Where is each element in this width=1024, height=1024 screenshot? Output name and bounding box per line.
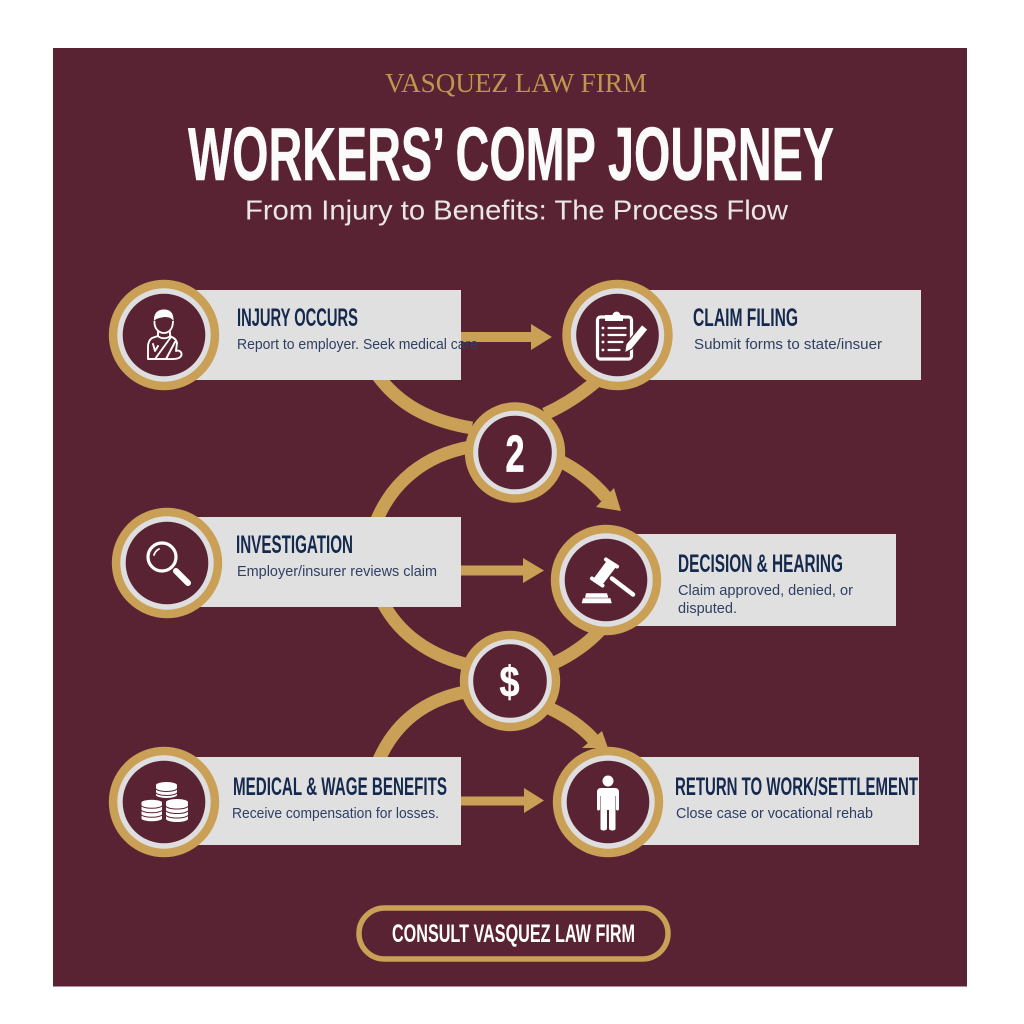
step badge: 2: 2 bbox=[506, 426, 524, 484]
card: return to work bbox=[630, 757, 919, 845]
card: decision and hearing bbox=[630, 534, 896, 626]
text: injury occurs: Report to employer. Seek medical care bbox=[237, 337, 478, 353]
heading: injury occurs: INJURY OCCURS bbox=[237, 304, 358, 332]
step badge: dollar: $ bbox=[500, 658, 520, 707]
subtitle: From Injury to Benefits: The Process Flow bbox=[245, 194, 789, 226]
heading: decision and hearing: DECISION & HEARING bbox=[678, 550, 843, 578]
icon: coin stacks bbox=[113, 751, 215, 853]
step badge: dollar bbox=[464, 635, 556, 727]
arrow: circle 2 to decision bbox=[560, 461, 621, 511]
arrow: dollar circle to return to work bbox=[549, 708, 608, 748]
card: injury occurs bbox=[190, 290, 478, 380]
call to action button bbox=[359, 908, 668, 959]
arrow: benefits to return to work bbox=[455, 788, 544, 813]
arrow: investigation to decision bbox=[455, 558, 544, 583]
arrow: injury to claim filing bbox=[455, 324, 552, 350]
step badge: 2 bbox=[469, 407, 561, 498]
text: claim filing: Submit forms to state/insuer bbox=[694, 337, 882, 353]
heading: medical and wage benefits: MEDICAL & WAGE BENEFITS bbox=[233, 773, 447, 801]
text: investigation: Employer/insurer reviews claim bbox=[237, 564, 437, 580]
card: investigation bbox=[195, 517, 461, 607]
icon: standing person bbox=[557, 751, 659, 853]
icon: magnifying glass bbox=[116, 512, 218, 614]
card: claim filing bbox=[640, 290, 921, 380]
text: decision and hearing: disputed. bbox=[678, 601, 737, 617]
icon: gavel bbox=[555, 529, 657, 631]
firm name: VASQUEZ LAW FIRM bbox=[385, 68, 647, 98]
text: return to work: Close case or vocational rehab bbox=[676, 806, 873, 822]
card: medical and wage benefits bbox=[190, 757, 461, 845]
text: decision and hearing: Claim approved, denied, or bbox=[678, 583, 853, 599]
icon: injured person bbox=[113, 284, 215, 386]
text: medical and wage benefits: Receive compensation for losses. bbox=[232, 806, 439, 822]
curved connector paths bbox=[376, 376, 602, 762]
icon: clipboard with pen bbox=[567, 284, 668, 386]
heading: claim filing: CLAIM FILING bbox=[693, 304, 798, 332]
heading: investigation: INVESTIGATION bbox=[236, 531, 353, 559]
call to action button: CONSULT VASQUEZ LAW FIRM bbox=[392, 920, 635, 948]
